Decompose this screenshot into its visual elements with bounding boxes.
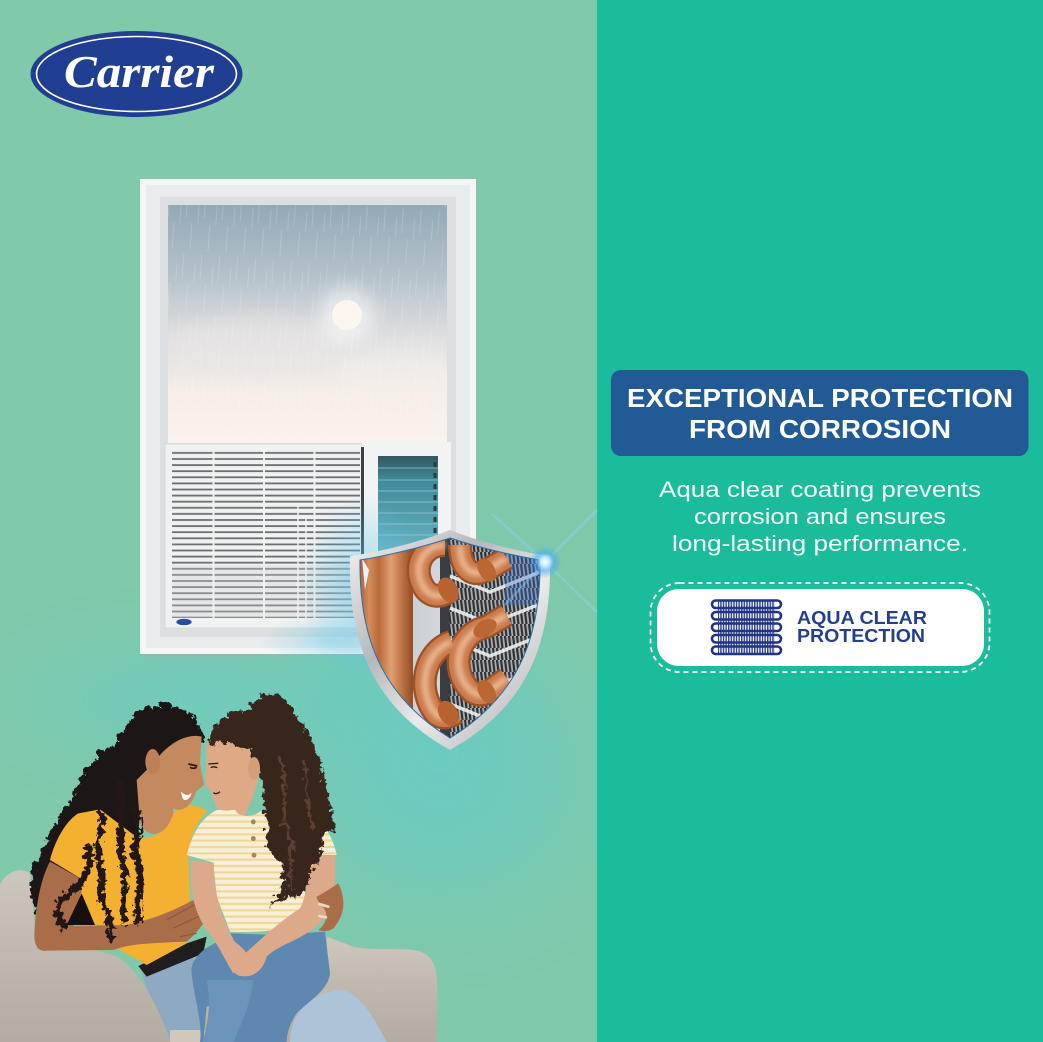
girl's hair highlights <box>277 757 312 887</box>
mother's neck and face <box>137 736 204 834</box>
heading text: EXCEPTIONAL PROTECTION <box>627 383 1013 413</box>
right background panel <box>597 0 1043 1042</box>
girl's striped shirt <box>187 805 337 932</box>
mother and daughter on armchair <box>0 692 437 1042</box>
girl's shirt buttons <box>246 822 261 855</box>
teal airflow glow <box>0 510 650 960</box>
U-bend copper tubes <box>419 545 507 730</box>
description text <box>659 477 981 556</box>
badge text: PROTECTION <box>797 626 925 646</box>
small Carrier badge on unit <box>176 618 192 626</box>
aqua clear protection badge <box>650 583 990 672</box>
armchair back section <box>167 937 437 1042</box>
dark hair gap by arm <box>67 893 95 925</box>
armchair left arm <box>0 870 171 1042</box>
mother's arm <box>34 862 210 951</box>
mother's skin hand highlight <box>319 904 328 917</box>
girl's right arm and clasped hands <box>232 855 335 976</box>
mother jeans <box>140 953 203 1042</box>
seat sliver <box>170 1030 207 1042</box>
girl's hair <box>206 692 333 905</box>
badge text <box>797 608 927 646</box>
icon: coil <box>712 600 781 654</box>
sparkle flare <box>492 510 597 612</box>
window frame <box>140 179 476 656</box>
mother's curls over shirt <box>56 780 137 937</box>
mother's far leg <box>290 990 387 1042</box>
AC side panel <box>361 442 451 630</box>
AC main grille <box>165 444 362 628</box>
blue air glow over unit <box>300 495 430 685</box>
mother's hand on girl's arm <box>317 883 343 931</box>
description text: Aqua clear coating prevents <box>659 477 981 502</box>
mother's yellow shirt <box>50 803 207 965</box>
girl's ear <box>248 757 260 780</box>
window view: rainy sky and sun <box>168 205 470 443</box>
mother's eye and brow <box>188 764 197 768</box>
mother's hand fingers <box>167 900 208 937</box>
girl's eye and smile <box>208 763 220 794</box>
girl's face and neck <box>205 739 259 815</box>
mother's smile <box>181 792 192 800</box>
vertical copper pipes <box>360 549 413 709</box>
badge text: AQUA CLEAR <box>797 608 927 628</box>
fin bars <box>450 572 540 720</box>
Carrier logo: Carrier <box>64 47 215 97</box>
description text: long-lasting performance. <box>672 531 968 556</box>
mother's belt <box>138 937 207 977</box>
air conditioner unit <box>165 442 451 630</box>
heading banner <box>611 370 1028 456</box>
description text: corrosion and ensures <box>694 504 946 529</box>
mother's hair behind <box>27 703 202 927</box>
left background panel <box>0 0 597 1042</box>
copper coil shield <box>350 510 597 750</box>
Carrier logo <box>30 31 242 117</box>
heading text <box>627 383 1013 444</box>
heading text: FROM CORROSION <box>689 414 951 444</box>
girl's jeans <box>192 932 330 1042</box>
mother's ear <box>145 749 160 774</box>
girl's left arm <box>191 860 247 973</box>
